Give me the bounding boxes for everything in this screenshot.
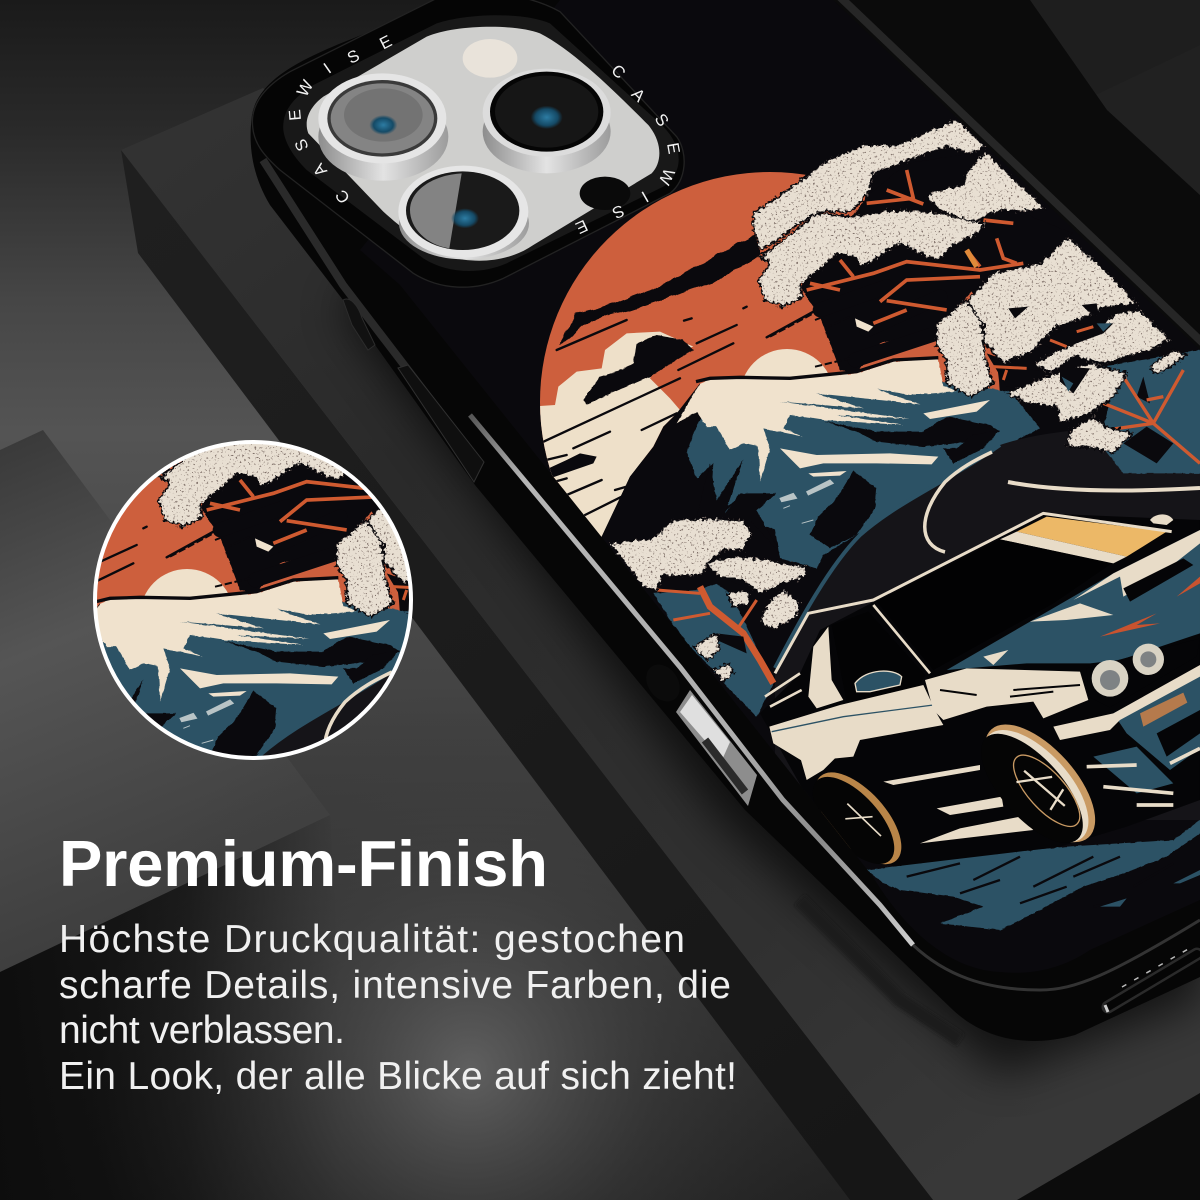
inset: magnified detail [93, 440, 413, 760]
side buttons [343, 299, 757, 806]
body copy [59, 918, 737, 1098]
charging port [1105, 948, 1197, 1012]
ring lettering: S [344, 46, 363, 68]
ring lettering: W [293, 77, 317, 100]
ring lettering: I [320, 59, 335, 77]
top blossom tree [753, 118, 1073, 373]
ring lettering: A [309, 159, 331, 180]
ring lettering: E [376, 31, 395, 53]
phone case body [251, 0, 1200, 1041]
car [760, 513, 1200, 881]
lens 2 [483, 69, 611, 173]
body copy: Ein Look, der alle Blicke auf sich zieht! [59, 1055, 737, 1098]
body copy: scharfe Details, intensive Farben, die [59, 964, 731, 1007]
body copy: nicht verblassen. [59, 1009, 345, 1052]
ring lettering: W [655, 166, 679, 188]
road [775, 428, 1200, 820]
ring lettering: A [628, 84, 650, 106]
ring lettering: C [331, 186, 354, 207]
ring lettering: E [285, 109, 305, 121]
phone artwork [540, 116, 1200, 930]
right blossom tree [937, 237, 1200, 473]
red sun disc [530, 160, 1050, 540]
flash [463, 39, 517, 78]
lens 1 [318, 73, 448, 181]
body copy: Höchste Druckqualität: gestochen [59, 918, 685, 961]
ring lettering: I [638, 187, 652, 206]
small blossom tree [610, 518, 807, 717]
ring lettering: S [609, 201, 627, 223]
road streaks [867, 820, 1200, 930]
microphone hole [580, 177, 630, 210]
ring lettering: S [651, 110, 673, 130]
ring lettering: C [607, 61, 629, 83]
mountain [600, 358, 1040, 598]
camera window [307, 27, 659, 261]
ring lettering: E [573, 216, 591, 238]
lens 3 [398, 166, 529, 259]
ring lettering [285, 31, 684, 238]
ring lettering: S [291, 136, 313, 154]
ring lettering: E [663, 141, 684, 155]
phone shadow [340, 150, 1200, 1075]
heading: Premium-Finish [59, 827, 548, 900]
camera bump [252, 0, 684, 287]
